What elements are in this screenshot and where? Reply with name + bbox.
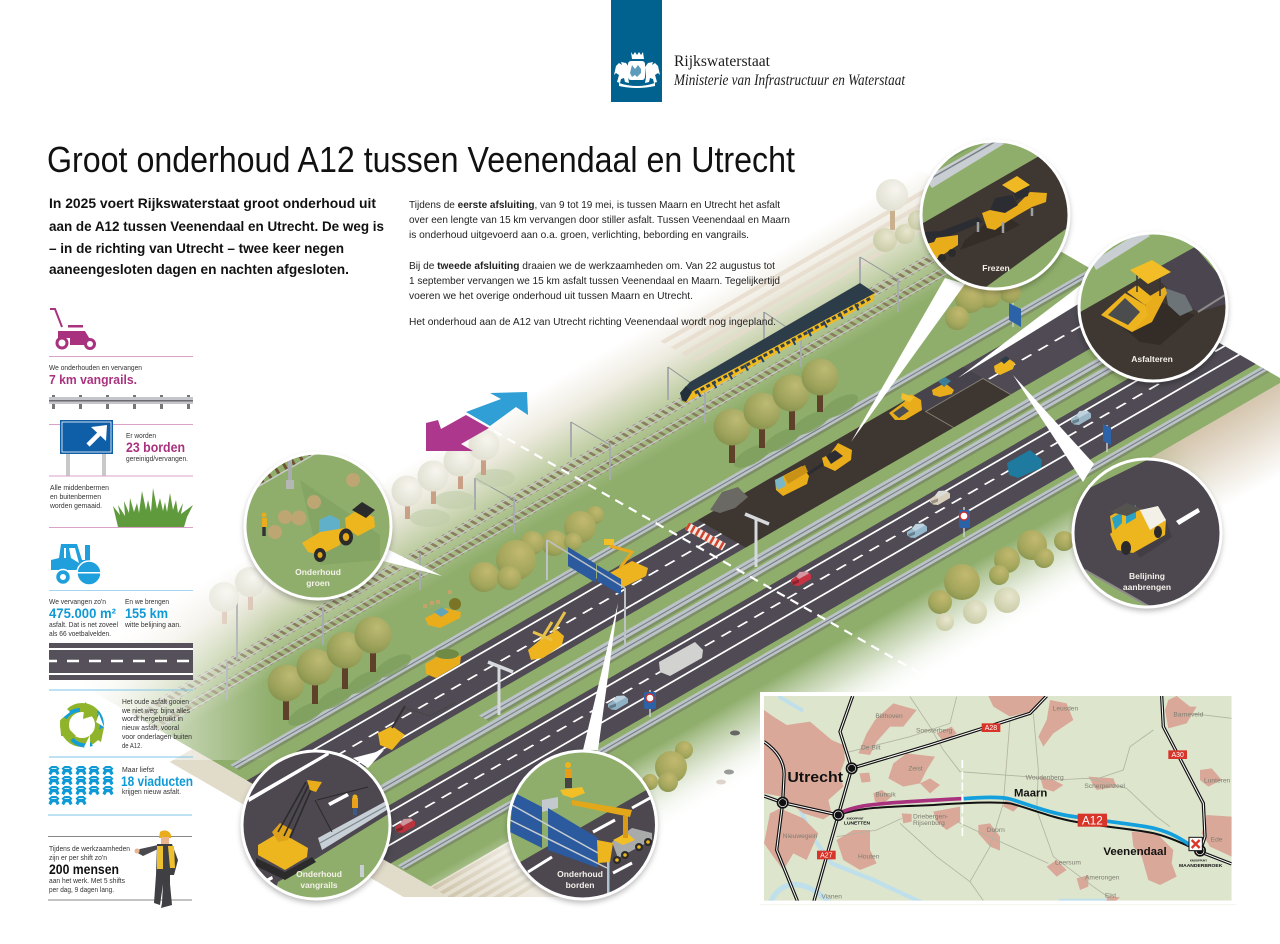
title: Groot onderhoud A12 tussen Veenendaal en Utrecht	[47, 139, 795, 180]
fact: hergebruik: Het oude asfalt gooien	[122, 697, 189, 706]
pale trees (faded background)	[209, 179, 928, 624]
callout: Onderhoud groen	[240, 443, 400, 605]
fact: borden: gereinigd/vervangen.	[126, 454, 188, 463]
town labels: Lunteren	[1204, 777, 1231, 784]
icon: viaducts	[48, 766, 114, 805]
fact: belijning	[124, 597, 181, 629]
label	[557, 869, 603, 890]
body text: Bij de tweede afsluiting draaien we de werkzaamheden om. Van 22 augustus tot	[409, 260, 775, 272]
fact: mensen: aan het werk. Met 5 shifts	[49, 876, 125, 885]
intro text: – in de richting van Utrecht – twee keer negen	[49, 240, 344, 256]
fact: bermen: en buitenbermen	[50, 492, 101, 501]
guardrails	[225, 268, 1270, 872]
road shields	[817, 723, 1187, 859]
cows	[716, 730, 740, 784]
label: borden	[566, 880, 594, 890]
town labels: Doorn	[987, 827, 1005, 834]
fact: asfalt: 475.000 m²	[49, 605, 116, 621]
dashed division	[962, 760, 964, 836]
fact: hergebruik: de A12.	[122, 741, 142, 750]
traffic on lower carriageway	[395, 410, 1091, 833]
fact: mensen: zijn er per shift zo'n	[49, 853, 107, 862]
town labels	[783, 706, 1231, 900]
icon: road section	[49, 643, 193, 680]
left fade over landscape	[0, 540, 275, 760]
label: vangrails	[300, 880, 338, 890]
town labels: Ede	[1211, 836, 1223, 843]
town labels: Barneveld	[1173, 711, 1204, 718]
junction markers	[777, 763, 1206, 856]
intro text	[49, 195, 384, 277]
water	[764, 697, 1107, 903]
machines on open carriageway	[378, 539, 648, 750]
fact: asfalt: We vervangen zo'n	[49, 597, 106, 606]
fact: viaducten: Maar liefst	[122, 765, 155, 774]
place names: Utrecht	[787, 770, 843, 786]
fact: borden	[126, 431, 188, 463]
fact: belijning: witte belijning aan.	[124, 620, 181, 629]
body text: over een lengte van 15 km vervangen door stiller asfalt. Tussen Veenendaal en Maarn	[409, 214, 790, 226]
icon: recycling arrows	[60, 702, 104, 749]
fact: vangrails: We onderhouden en vervangen	[49, 363, 142, 372]
fact: bermen	[49, 483, 109, 510]
town labels: Driebergen-	[913, 813, 948, 820]
fact: borden: 23 borden	[126, 439, 185, 455]
secondary roads	[837, 697, 1232, 901]
fact: bermen: worden gemaaid.	[49, 501, 102, 510]
icon: lawn mower	[50, 309, 94, 348]
wordmark: Rijkswaterstaat	[674, 53, 771, 70]
label	[296, 869, 342, 890]
intro text: aaneengesloten dagen en nachten afgesloten.	[49, 261, 349, 277]
arrow: towards Veenendaal	[466, 392, 528, 426]
machines on closed carriageway	[775, 356, 1015, 496]
fact: belijning: En we brengen	[125, 597, 169, 606]
icon: worker	[134, 830, 178, 908]
town labels: Soesterberg	[916, 727, 953, 734]
fact: mensen	[49, 844, 130, 894]
label: Asfalteren	[1131, 354, 1173, 364]
icon: blue road sign	[60, 420, 113, 476]
label: Onderhoud	[296, 869, 342, 879]
fact: asfalt	[49, 597, 118, 638]
label: groen	[306, 578, 330, 588]
roadside signs	[644, 303, 1111, 717]
town labels: Bilthoven	[875, 713, 903, 720]
left facts column	[48, 309, 193, 908]
road shields: A27	[820, 852, 833, 859]
body text: voeren we het overige onderhoud uit tussen Maarn en Utrecht.	[409, 290, 693, 302]
label: Onderhoud	[295, 567, 341, 577]
trees	[268, 358, 861, 730]
junction labels	[844, 817, 1223, 868]
road shields: A28	[985, 725, 997, 732]
fact: viaducten: 18 viaducten	[121, 773, 193, 789]
fact: hergebruik: nieuw asfalt, vooral	[122, 723, 179, 732]
road shields: A12	[1082, 814, 1103, 827]
direction arrows	[426, 392, 528, 451]
fact: mensen: Tijdens de werkzaamheden	[49, 844, 130, 853]
motorways	[764, 696, 1232, 903]
town labels: De Bilt	[861, 744, 881, 751]
pointers to callouts	[353, 278, 1094, 768]
place names	[787, 770, 1167, 858]
fact: asfalt: als 66 voetbalvelden.	[49, 629, 111, 638]
dashed phase boundary line	[494, 431, 960, 696]
place names: Maarn	[1014, 788, 1048, 800]
town labels: Leersum	[1055, 859, 1081, 866]
body text	[409, 199, 790, 328]
field stripes behind the tracks	[662, 182, 972, 360]
logo: Rijkswaterstaat	[611, 0, 906, 102]
label	[1123, 571, 1171, 592]
fact: belijning: 155 km	[125, 605, 168, 621]
callout: Asfalteren	[1075, 226, 1240, 385]
town labels: Houten	[858, 854, 880, 861]
fact: asfalt: asfalt. Dat is net zoveel	[49, 620, 118, 629]
map panel	[760, 692, 1236, 905]
scene: isometric A12 road landscape	[102, 142, 1280, 906]
fact: hergebruik: voor onderlagen buiten	[122, 732, 192, 741]
junction labels: KNOOPPUNT	[1190, 859, 1207, 863]
ministry: Ministerie van Infrastructuur en Waterstaat	[673, 72, 906, 89]
fact: bermen: Alle middenbermen	[50, 483, 109, 492]
road shields: A30	[1171, 752, 1184, 759]
road barrier	[687, 526, 724, 547]
bushes	[469, 281, 1074, 792]
icon: guardrail	[49, 395, 193, 409]
town labels: Scherpenzeel	[1084, 783, 1126, 790]
town labels: Leusden	[1053, 706, 1079, 713]
town labels: Elst	[1105, 892, 1116, 899]
junction labels: MAANDERBROEK	[1179, 863, 1223, 868]
callout: Onderhoud vangrails	[240, 748, 395, 905]
lamps	[488, 514, 769, 715]
arrow: towards Utrecht	[426, 415, 489, 451]
body text: 1 september vervangen we 15 km asfalt tussen Veenendaal en Maarn. Tegelijkertijd	[409, 275, 780, 287]
town labels: Zeist	[908, 765, 923, 772]
town labels: Woudenberg	[1026, 774, 1064, 781]
rock pile	[710, 487, 748, 513]
gantry with blue signs	[547, 540, 625, 645]
callout: Onderhoud borden	[505, 748, 665, 905]
label: Frezen	[982, 263, 1010, 273]
junction labels: KNOOPPUNT	[847, 817, 864, 821]
fact: hergebruik: we niet weg: bijna alles	[121, 706, 190, 715]
fact: hergebruik	[121, 697, 192, 750]
place names: Veenendaal	[1103, 846, 1167, 858]
urban areas	[764, 696, 1232, 903]
callout: Belijning aanbrengen	[1060, 450, 1225, 610]
intro text: aan de A12 tussen Veenendaal en Utrecht. De weg is	[49, 218, 384, 234]
icon: grass	[113, 488, 193, 527]
body text: Het onderhoud aan de A12 van Utrecht richting Veenendaal wordt nog ingepland.	[409, 316, 776, 328]
end marker	[1189, 837, 1202, 851]
town labels: Bunnik	[875, 792, 896, 799]
label: Onderhoud	[557, 869, 603, 879]
train	[680, 283, 875, 403]
intro text: In 2025 voert Rijkswaterstaat groot onderhoud uit	[49, 195, 376, 211]
fact: viaducten: krijgen nieuw asfalt.	[122, 787, 181, 796]
town labels: Amerongen	[1085, 874, 1120, 881]
fact: vangrails: 7 km vangrails.	[49, 372, 137, 387]
town labels: Nieuwegein	[783, 833, 818, 840]
catenary masts	[227, 257, 898, 700]
label	[295, 567, 341, 588]
label: Belijning	[1129, 571, 1165, 581]
fact: hergebruik: wordt hergebruikt in	[121, 714, 183, 723]
town labels: Rijsenburg	[913, 820, 945, 827]
fact: vangrails	[49, 363, 142, 387]
fact: mensen: per dag, 9 dagen lang.	[49, 885, 114, 894]
fact: viaducten	[121, 765, 193, 796]
body text: is onderhoud uitgevoerd aan o.a. groen, verlichting, bebording en vangrails.	[409, 229, 749, 241]
junction labels: LUNETTEN	[844, 821, 871, 826]
town labels: Vianen	[821, 893, 842, 900]
icon: road roller	[51, 544, 102, 585]
callout: Frezen	[917, 142, 1073, 296]
logo block with coat of arms	[611, 0, 662, 102]
fact: borden: Er worden	[126, 431, 156, 440]
body text: Tijdens de eerste afsluiting, van 9 tot 19 mei, is tussen Maarn en Utrecht het asfalt	[409, 199, 780, 211]
label: aanbrengen	[1123, 582, 1171, 592]
fact: mensen: 200 mensen	[49, 861, 119, 877]
